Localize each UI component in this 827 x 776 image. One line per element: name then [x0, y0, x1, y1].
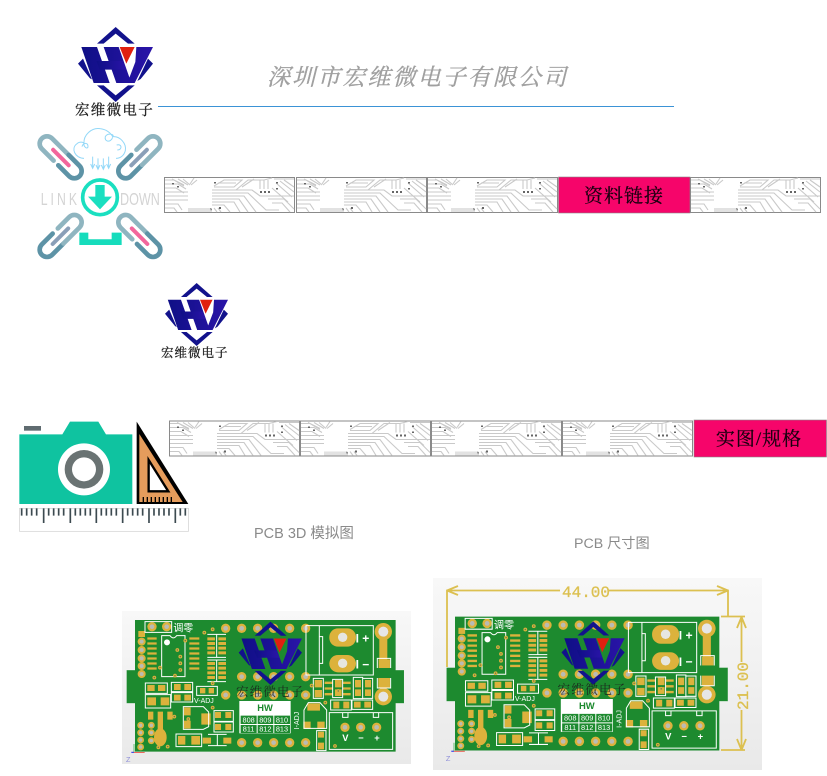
- PCB silkscreen text: 808: [243, 715, 255, 724]
- heading tag: photos and specs: 实图/规格: [716, 428, 802, 450]
- panel: PCB 3D render: [122, 611, 411, 764]
- icon: set square: [137, 422, 188, 504]
- PCB silkscreen text with dimensions: 810: [598, 714, 610, 723]
- PCB silkscreen text with dimensions: HW: [579, 701, 595, 712]
- PCB silkscreen text: [126, 623, 380, 764]
- circuit banner: photos and specs: [170, 420, 826, 457]
- PCB silkscreen text: Z: [126, 755, 131, 764]
- PCB silkscreen text with dimensions: 812: [581, 723, 593, 732]
- PCB silkscreen text: I −: [356, 657, 369, 671]
- PCB silkscreen text with dimensions: +: [698, 732, 704, 743]
- middle logo caption: 宏维微电子: [161, 345, 229, 360]
- icon: cloud: [74, 129, 125, 169]
- board watermark text 2: 宏维微电子: [557, 682, 627, 697]
- PCB silkscreen text with dimensions: I-ADJ: [615, 710, 623, 728]
- company title: 深圳市宏维微电子有限公司: [267, 65, 569, 90]
- header rule: [158, 106, 674, 107]
- PCB silkscreen text with dimensions: 调零: [494, 619, 514, 632]
- top logo: [75, 27, 154, 119]
- heading tag: photos and specs: [694, 420, 826, 457]
- PCB silkscreen text with dimensions: −: [681, 732, 687, 743]
- PCB silkscreen text with dimensions: I +: [679, 628, 693, 642]
- PCB silkscreen text: 811: [243, 724, 254, 733]
- PCB silkscreen text: HW: [257, 703, 273, 713]
- width dimension: [447, 584, 728, 667]
- PCB silkscreen text: V-ADJ: [194, 698, 214, 705]
- PCB silkscreen text with dimensions: [446, 619, 704, 763]
- PCB silkscreen text with dimensions: V-ADJ: [515, 695, 535, 703]
- icon: camera and ruler: [19, 422, 188, 531]
- heading tag: data links: [558, 177, 690, 213]
- height dimension: [721, 616, 753, 750]
- link label left: LINK: [41, 190, 80, 210]
- PCB silkscreen text: I +: [356, 631, 369, 645]
- PCB silkscreen text with dimensions: 809: [581, 714, 593, 723]
- height dimension: 21.00: [735, 662, 753, 710]
- PCB silkscreen text: V: [342, 733, 349, 743]
- PCB silkscreen text: 810: [276, 715, 288, 724]
- circuit banner: link data: [164, 177, 820, 213]
- board watermark text: 宏维微电子: [236, 684, 304, 699]
- PCB silkscreen text: 调零: [173, 623, 193, 635]
- caption: PCB 3D: PCB 3D 模拟图: [254, 525, 354, 542]
- heading tag: data links: 资料链接: [584, 185, 664, 207]
- icon: link download: [37, 129, 163, 260]
- PCB silkscreen text: −: [358, 733, 364, 743]
- PCB silkscreen text with dimensions: 808: [564, 714, 576, 723]
- PCB silkscreen text with dimensions: 813: [598, 723, 610, 732]
- icon: ruler: [19, 508, 188, 531]
- PCB silkscreen text: I-ADJ: [294, 712, 301, 729]
- logo caption: 宏维微电子: [75, 101, 154, 119]
- PCB silkscreen text with dimensions: I −: [679, 655, 693, 669]
- middle logo: [161, 283, 229, 360]
- icon: download circle: [79, 180, 122, 245]
- width dimension: 44.00: [562, 584, 610, 602]
- PCB silkscreen text with dimensions: 811: [564, 723, 576, 732]
- PCB silkscreen text: +: [374, 733, 380, 743]
- PCB silkscreen text: 813: [276, 724, 288, 733]
- PCB silkscreen text with dimensions: Z: [446, 754, 451, 763]
- PCB silkscreen text: 809: [259, 715, 271, 724]
- caption: PCB size: PCB 尺寸图: [574, 536, 650, 552]
- PCB silkscreen text with dimensions: V: [665, 732, 672, 743]
- PCB silkscreen text: 812: [259, 724, 271, 733]
- link label right: DOWN: [120, 190, 160, 210]
- panel: PCB dimension drawing: [433, 578, 762, 770]
